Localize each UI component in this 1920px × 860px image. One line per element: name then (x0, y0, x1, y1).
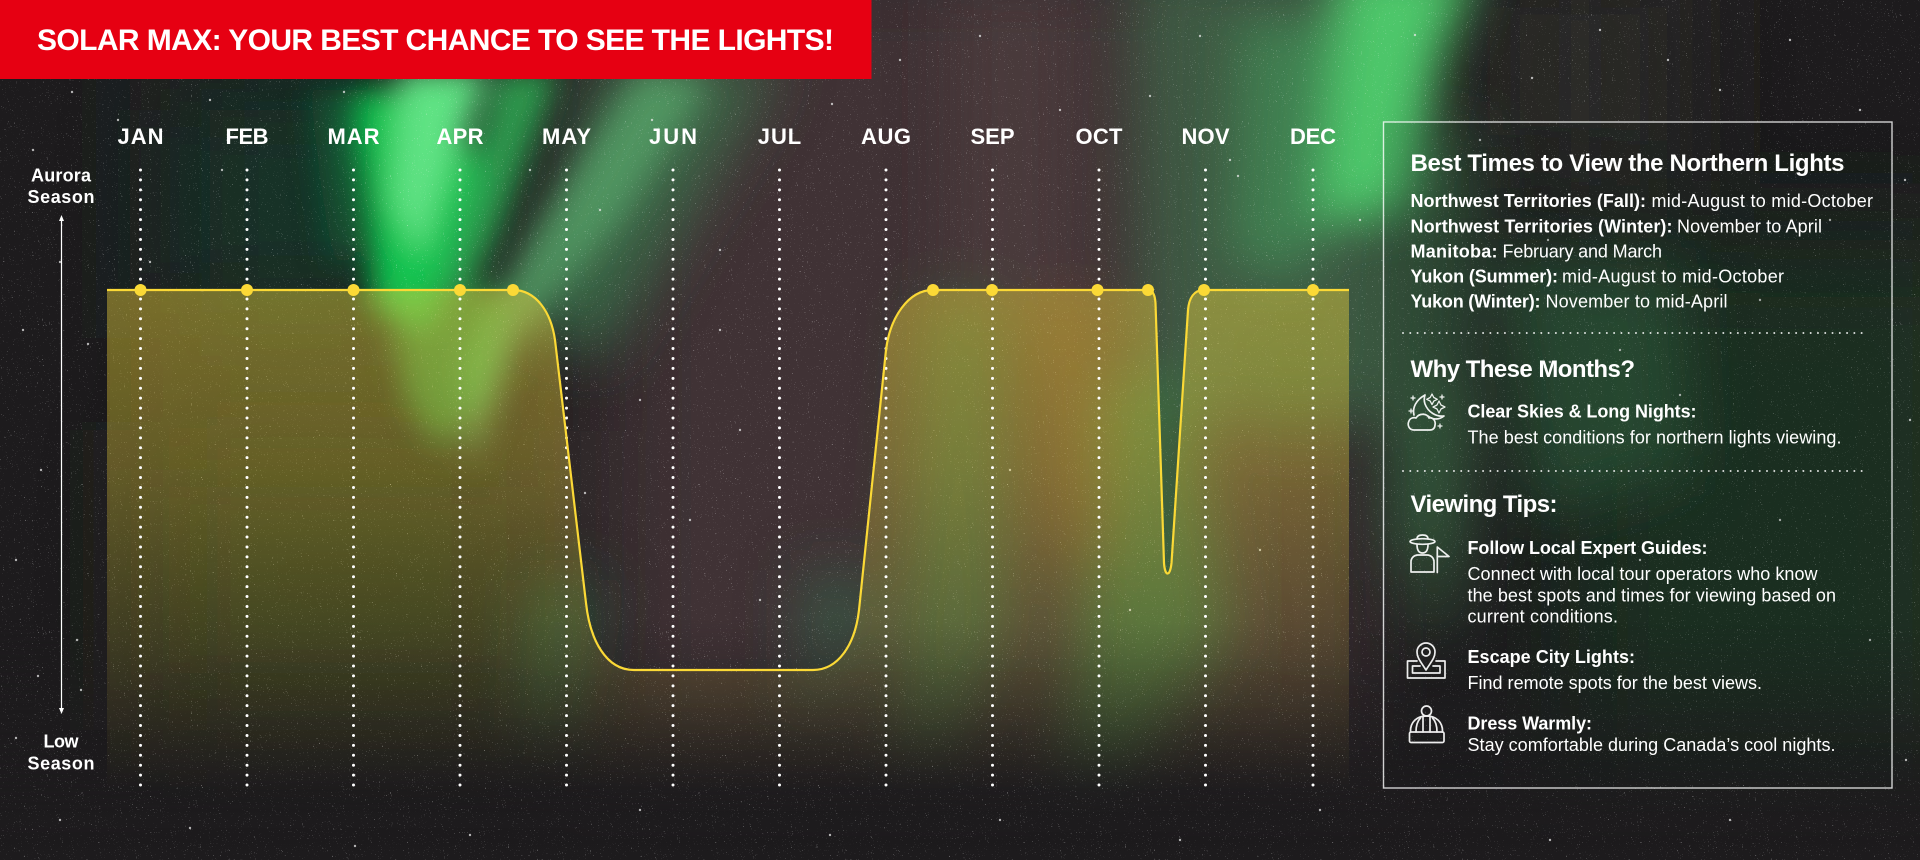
best times list: Yukon (Summer): (1410, 266, 1558, 286)
best times list: November to April (1677, 216, 1822, 236)
icon: winter hat (1410, 706, 1444, 742)
month labels: AUG (861, 124, 911, 149)
month gridlines (140, 170, 1313, 786)
month labels: NOV (1182, 124, 1230, 149)
month labels: JUL (758, 124, 801, 149)
month labels: APR (436, 124, 484, 149)
y axis label: low season: Low (44, 732, 79, 752)
item: clear skies: The best conditions for northern lights viewing. (1468, 428, 1842, 448)
month labels: JUN (649, 124, 697, 149)
month labels: SEP (970, 124, 1014, 149)
best times list: Yukon (Winter): (1410, 292, 1540, 312)
y axis label: low season (28, 732, 94, 774)
best times list: Northwest Territories (Fall): (1410, 191, 1646, 211)
month labels: OCT (1076, 124, 1123, 149)
item: local guides (1468, 538, 1836, 626)
month labels: MAY (542, 124, 591, 149)
item: clear skies (1468, 402, 1842, 448)
item: dress warmly (1468, 714, 1836, 755)
curve markers (134, 284, 1319, 296)
icon: moon, stars and cloud (1408, 394, 1445, 430)
y axis label: low season: Season (28, 754, 94, 774)
item: local guides: current conditions. (1468, 606, 1618, 626)
best times list: mid-August to mid-October (1562, 266, 1784, 286)
area fill: aurora season curve (107, 290, 1349, 790)
item: dress warmly: Dress Warmly: (1468, 714, 1592, 734)
heading: viewing tips: Viewing Tips: (1410, 491, 1558, 518)
item: local guides: Follow Local Expert Guides: (1468, 538, 1708, 558)
best times list: Manitoba: (1410, 242, 1498, 262)
heading: why these months: Why These Months? (1410, 356, 1635, 383)
item: local guides: the best spots and times for viewing based on (1468, 586, 1836, 606)
month labels: MAR (328, 124, 380, 149)
y axis label: aurora season (28, 166, 94, 207)
item: escape city lights: Escape City Lights: (1468, 647, 1635, 667)
month labels: JAN (118, 124, 164, 149)
title banner: SOLAR MAX: YOUR BEST CHANCE TO SEE THE LIGHTS! (37, 24, 834, 57)
item: escape city lights: Find remote spots for the best views. (1468, 673, 1762, 693)
best times list: November to mid-April (1546, 292, 1728, 312)
best times list: mid-August to mid-October (1652, 191, 1873, 211)
curve line (107, 290, 1349, 670)
month labels: DEC (1290, 124, 1336, 149)
item: clear skies: Clear Skies & Long Nights: (1468, 402, 1696, 422)
best times list: Northwest Territories (Winter): (1410, 216, 1672, 236)
item: local guides: Connect with local tour operators who know (1468, 564, 1818, 584)
item: dress warmly: Stay comfortable during Canada’s cool nights. (1468, 735, 1836, 755)
best times list: February and March (1502, 242, 1662, 262)
icon: map pin (1408, 643, 1445, 678)
month labels (118, 124, 1336, 149)
month labels: FEB (226, 124, 268, 149)
y axis double arrow (59, 215, 64, 714)
icon: ranger guide with flag (1410, 535, 1449, 572)
y axis label: aurora season: Aurora (31, 166, 92, 186)
item: escape city lights (1468, 647, 1762, 693)
title banner (0, 0, 872, 79)
best times list (1410, 191, 1873, 312)
heading: best times: Best Times to View the Northern Lights (1410, 150, 1844, 177)
y axis label: aurora season: Season (28, 187, 94, 207)
panel: viewing information (1384, 122, 1892, 788)
